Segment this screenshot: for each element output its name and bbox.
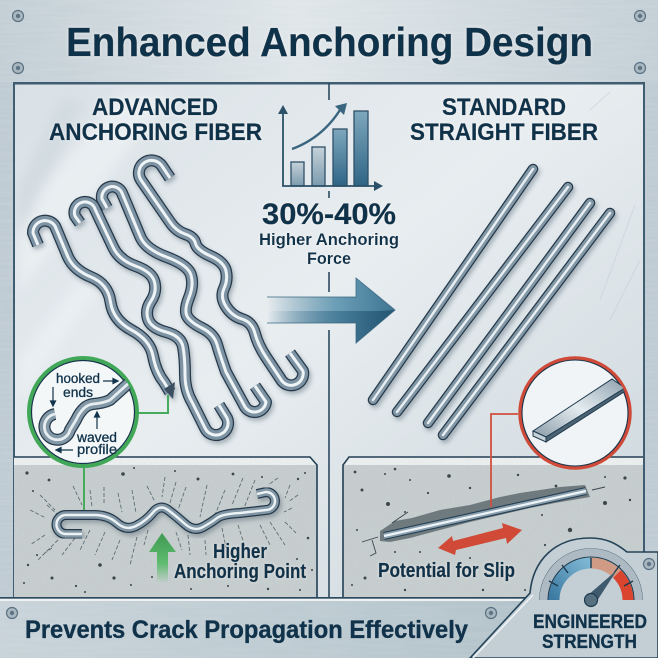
callout labels: waved xyxy=(76,430,117,445)
stress lines around anchor xyxy=(30,477,298,565)
stat: 30%-40% higher anchoring force xyxy=(259,198,399,268)
straight fiber 3 xyxy=(428,203,590,423)
crack with slipping fiber xyxy=(362,485,605,556)
straight fibers xyxy=(373,169,610,435)
heading: standard straight fiber: STANDARD xyxy=(442,94,566,121)
badge label: ENGINEERED xyxy=(533,612,647,633)
flat strip end xyxy=(533,379,627,442)
header screws xyxy=(12,10,646,74)
panel: right concrete block xyxy=(343,457,643,598)
band screws right xyxy=(486,608,514,650)
concrete speckles xyxy=(351,468,631,591)
heading: advanced anchoring fiber: ADVANCED xyxy=(92,94,218,121)
green connectors xyxy=(84,395,168,510)
anchored fiber in concrete xyxy=(56,492,275,534)
heading: standard straight fiber xyxy=(410,94,598,146)
fiber 1 xyxy=(33,221,175,399)
heading: standard straight fiber: STRAIGHT FIBER xyxy=(410,119,598,146)
callout: smooth flat fiber detail xyxy=(520,358,630,468)
needle xyxy=(584,570,617,606)
callout labels xyxy=(56,371,117,457)
red connector xyxy=(491,414,518,507)
bar chart: rising anchoring force xyxy=(278,103,383,191)
label: potential for slip: Potential for Slip xyxy=(378,560,515,582)
center divider xyxy=(328,83,330,598)
stat: 30%-40% higher anchoring force: 30%-40% xyxy=(262,198,396,231)
straight fiber 1 xyxy=(373,169,533,400)
callout: hooked waved detail xyxy=(29,358,137,466)
fiber 2 xyxy=(74,202,228,435)
badge: engineered strength xyxy=(470,538,658,658)
bottom band xyxy=(0,597,658,658)
waved hooked fibers xyxy=(33,160,303,435)
fiber 3 xyxy=(102,187,266,412)
straight fiber 2 xyxy=(397,187,568,412)
label: higher anchoring point: Anchoring Point xyxy=(174,561,306,583)
badge label: STRENGTH xyxy=(542,632,637,653)
callout pointers xyxy=(50,378,118,452)
takeaway text: Prevents Crack Propagation Effectively xyxy=(25,616,468,644)
band screw xyxy=(6,608,18,618)
stat: 30%-40% higher anchoring force: Higher Anchoring xyxy=(259,231,399,249)
title: Enhanced Anchoring Design xyxy=(66,19,593,65)
concrete speckles xyxy=(23,467,313,593)
label: higher anchoring point: Higher xyxy=(213,541,267,563)
panel: comparison area xyxy=(13,82,645,598)
heading: advanced anchoring fiber xyxy=(49,94,262,146)
callout labels: hooked xyxy=(56,371,100,386)
panel: left concrete block xyxy=(14,457,317,598)
label: higher anchoring point xyxy=(174,541,306,583)
gauge xyxy=(540,549,642,600)
straight fiber 4 xyxy=(443,213,610,435)
callout labels: ends xyxy=(63,385,93,400)
callout labels: profile xyxy=(77,442,117,457)
heading: advanced anchoring fiber: ANCHORING FIBER xyxy=(49,119,262,146)
arrow: advanced to standard xyxy=(267,278,395,343)
arrow: potential slip xyxy=(438,523,522,555)
arrow: higher anchoring point xyxy=(149,533,176,583)
stat: 30%-40% higher anchoring force: Force xyxy=(307,250,351,268)
magnified fiber xyxy=(44,382,130,440)
fiber 4 xyxy=(139,160,303,385)
badge label xyxy=(533,612,647,653)
